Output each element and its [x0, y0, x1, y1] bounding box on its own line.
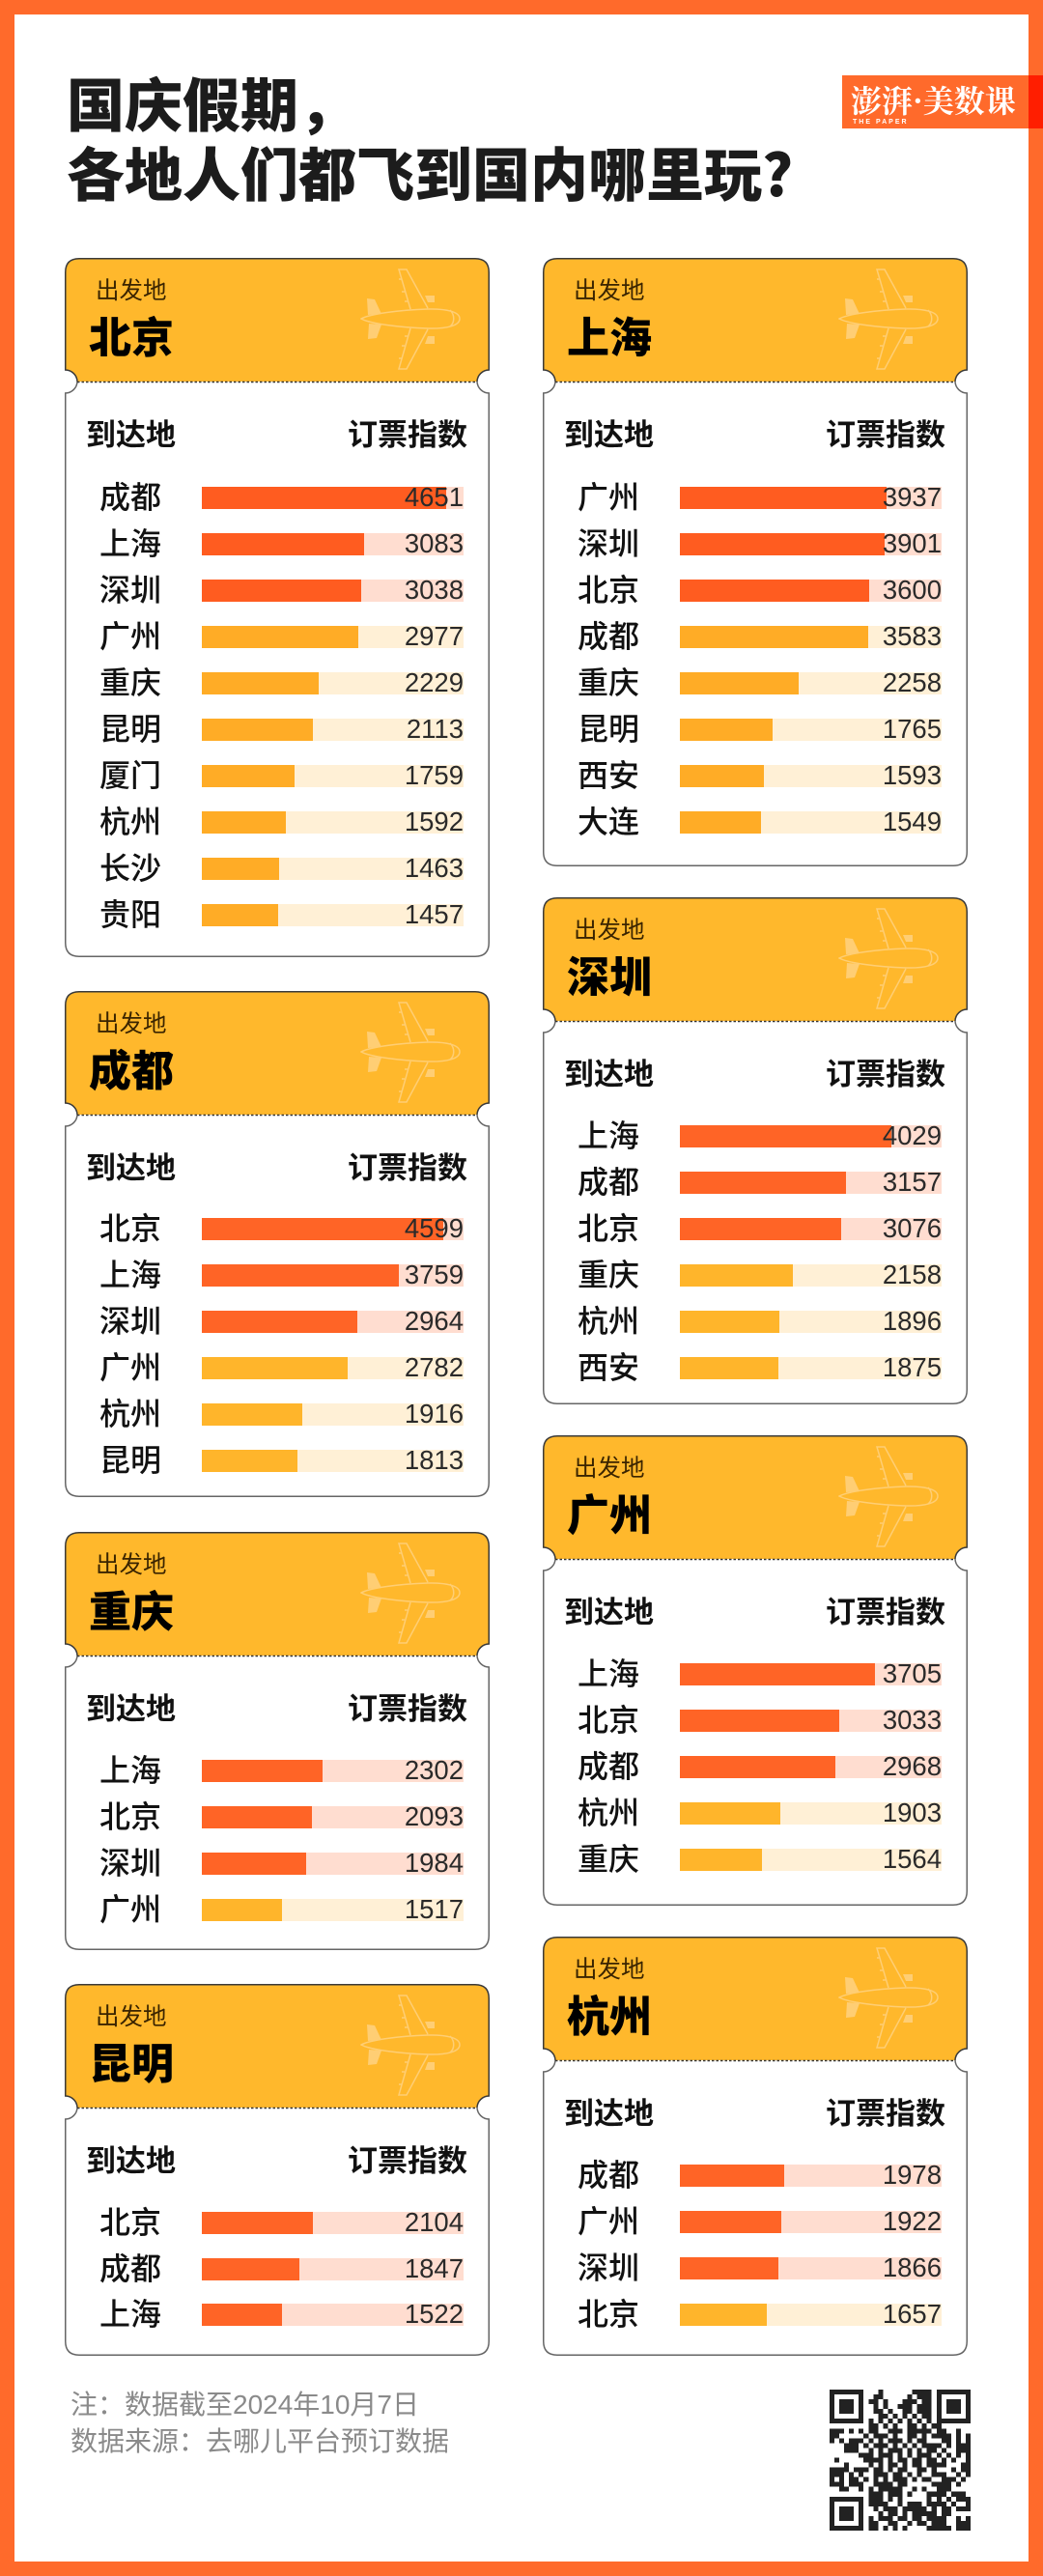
logo: 澎湃·美数课: THE PAPER	[853, 119, 909, 126]
row: 重庆 2158: 重庆	[578, 1251, 639, 1295]
row: 成都 3157	[543, 1172, 968, 1194]
title: 国庆假期，	[67, 60, 356, 144]
row: 成都 3583: 成都	[578, 612, 639, 657]
column heading: 订票指数: 订票指数	[826, 2089, 945, 2133]
row: 深圳 2964: 深圳	[99, 1297, 161, 1342]
city: 北京: 北京	[89, 303, 174, 365]
data source: 数据来源：去哪儿平台预订数据	[70, 2426, 449, 2456]
column heading: 到达地: 到达地	[564, 1050, 654, 1093]
row: 重庆 2258	[578, 659, 942, 703]
row: 深圳 3901: 深圳	[578, 520, 639, 564]
row: 北京 4599	[99, 1204, 464, 1249]
row: 重庆 2258: 2258	[883, 667, 942, 697]
panel: 杭州	[543, 1937, 968, 2356]
icon: airplane	[360, 1002, 461, 1103]
row: 厦门 1759	[99, 751, 464, 796]
column heading: 到达地: 到达地	[564, 1588, 654, 1631]
row: 杭州 1896: 1896	[883, 1306, 942, 1336]
city: 成都: 成都	[89, 1036, 174, 1098]
row: 北京 4599: 北京	[99, 1204, 161, 1249]
row: 杭州 1592: 1592	[405, 807, 464, 836]
row: 上海 3759: 3759	[405, 1260, 464, 1289]
label: 出发地: 出发地	[96, 1998, 166, 2032]
row: 昆明 1813	[99, 1436, 464, 1481]
row: 深圳 2964: 2964	[405, 1306, 464, 1336]
row: 成都 4651: 成都	[99, 473, 161, 518]
row: 成都 3583: 3583	[883, 621, 942, 651]
column heading: 到达地: 到达地	[86, 1684, 176, 1728]
row: 重庆 2158	[543, 1264, 968, 1287]
row: 北京 3076	[543, 1218, 968, 1240]
row: 广州 3937: 广州	[578, 473, 639, 518]
title	[67, 60, 793, 213]
row: 成都 2968	[543, 1756, 968, 1778]
row: 杭州 1903	[543, 1802, 968, 1825]
row: 广州 2782: 2782	[405, 1352, 464, 1382]
label: 出发地: 出发地	[96, 272, 166, 306]
row: 成都 3583	[578, 612, 942, 657]
row: 深圳 2964	[99, 1297, 464, 1342]
row: 上海 3705: 3705	[883, 1658, 942, 1688]
row: 北京 2104: 北京	[99, 2198, 161, 2243]
row: 北京 2104: 2104	[405, 2207, 464, 2237]
row: 昆明 2113	[99, 705, 464, 750]
row: 成都 3157: 3157	[883, 1167, 942, 1197]
row: 上海 1522: 1522	[405, 2299, 464, 2329]
row: 上海 3705	[543, 1663, 968, 1685]
row: 杭州 1903: 杭州	[578, 1789, 639, 1833]
city: 杭州: 杭州	[567, 1982, 652, 2044]
row: 昆明 2113: 2113	[407, 714, 464, 744]
icon: airplane	[838, 269, 939, 370]
row: 北京 3600: 北京	[578, 566, 639, 610]
row: 深圳 1984	[99, 1839, 464, 1883]
row: 广州 1922	[543, 2211, 968, 2233]
row: 成都 4651	[99, 473, 464, 518]
row: 广州 3937: 3937	[883, 482, 942, 512]
city: 重庆: 重庆	[89, 1577, 174, 1639]
row: 重庆 1564: 1564	[883, 1844, 942, 1874]
panel: 北京	[65, 258, 490, 957]
row: 北京 2093	[99, 1793, 464, 1837]
row: 深圳 1866: 1866	[883, 2252, 942, 2282]
row: 重庆 2229: 2229	[405, 667, 464, 697]
row: 深圳 3038	[99, 566, 464, 610]
row: 上海 4029: 4029	[883, 1120, 942, 1150]
row: 深圳 1866: 深圳	[578, 2244, 639, 2288]
row: 深圳 3038: 3038	[405, 575, 464, 605]
row: 大连 1549: 大连	[578, 798, 639, 842]
label: 出发地: 出发地	[574, 1450, 645, 1484]
row: 杭州 1903: 1903	[883, 1798, 942, 1827]
logo: 澎湃·美数课	[842, 75, 1043, 128]
row: 上海 3705: 上海	[578, 1650, 639, 1694]
row: 大连 1549: 1549	[883, 807, 942, 836]
row: 北京 2104	[99, 2198, 464, 2243]
row: 北京 1657: 北京	[578, 2290, 639, 2335]
row: 昆明 2113: 昆明	[99, 705, 161, 750]
row: 广州 2977: 2977	[405, 621, 464, 651]
row: 北京 1657: 1657	[883, 2299, 942, 2329]
column heading: 到达地: 到达地	[564, 410, 654, 454]
row: 上海 3759	[99, 1251, 464, 1295]
panel: 成都	[65, 991, 490, 1497]
row: 上海 4029: 上海	[578, 1112, 639, 1156]
row: 西安 1875: 1875	[883, 1352, 942, 1382]
QR code	[830, 2390, 971, 2531]
label: 出发地: 出发地	[96, 1005, 166, 1039]
column heading: 订票指数: 订票指数	[348, 2137, 467, 2180]
city: 昆明: 昆明	[89, 2029, 174, 2091]
row: 深圳 3901: 3901	[883, 528, 942, 558]
row: 北京 3076: 北京	[578, 1204, 639, 1249]
panel: 上海	[543, 258, 968, 866]
label: 出发地: 出发地	[574, 272, 645, 306]
row: 长沙 1463: 1463	[405, 853, 464, 883]
note: 注：数据截至2024年10月7日	[70, 2390, 419, 2420]
row: 成都 1978: 1978	[883, 2160, 942, 2190]
row: 广州 2782	[99, 1344, 464, 1388]
row: 北京 2093: 2093	[405, 1801, 464, 1831]
row: 广州 1922: 广州	[578, 2197, 639, 2242]
row: 成都 1847: 成都	[99, 2245, 161, 2289]
row: 长沙 1463	[99, 844, 464, 889]
row: 重庆 2258: 重庆	[578, 659, 639, 703]
row: 广州 2977	[99, 612, 464, 657]
row: 深圳 1984: 深圳	[99, 1839, 161, 1883]
row: 昆明 1765	[578, 705, 942, 750]
label: 出发地: 出发地	[574, 1951, 645, 1985]
row: 杭州 1916	[99, 1390, 464, 1434]
label: 出发地: 出发地	[96, 1546, 166, 1580]
row: 大连 1549	[543, 811, 968, 834]
row: 北京 3600	[578, 566, 942, 610]
row: 西安 1593	[543, 765, 968, 787]
row: 上海 3083	[99, 520, 464, 564]
row: 成都 1847: 1847	[405, 2253, 464, 2283]
column heading: 订票指数: 订票指数	[348, 1684, 467, 1728]
row: 北京 1657	[543, 2304, 968, 2326]
row: 北京 3033: 北京	[578, 1696, 639, 1741]
row: 北京 3033	[543, 1710, 968, 1732]
city: 广州: 广州	[567, 1481, 652, 1543]
row: 广州 1517: 1517	[405, 1894, 464, 1924]
row: 上海 3759: 上海	[99, 1251, 161, 1295]
row: 厦门 1759: 1759	[405, 760, 464, 790]
row: 杭州 1896	[543, 1311, 968, 1333]
column heading: 订票指数: 订票指数	[826, 410, 945, 454]
row: 广州 2977: 广州	[99, 612, 161, 657]
column heading: 到达地: 到达地	[564, 2089, 654, 2133]
row: 西安 1593: 1593	[883, 760, 942, 790]
row: 杭州 1896: 杭州	[578, 1297, 639, 1342]
row: 上海 2302: 上海	[99, 1746, 161, 1791]
row: 重庆 1564	[543, 1849, 968, 1871]
row: 成都 1978	[543, 2165, 968, 2187]
row: 北京 4599: 4599	[405, 1213, 464, 1243]
row: 上海 1522: 上海	[99, 2290, 161, 2335]
icon: airplane	[838, 1446, 939, 1547]
row: 成都 1978: 成都	[578, 2151, 639, 2195]
title: 各地人们都飞到国内哪里玩?	[67, 129, 793, 213]
row: 昆明 1765: 1765	[883, 714, 942, 744]
row: 西安 1875	[543, 1357, 968, 1379]
row: 成都 4651: 4651	[405, 482, 464, 512]
row: 深圳 1866	[543, 2257, 968, 2279]
panel: 重庆	[65, 1532, 490, 1950]
column heading: 到达地: 到达地	[86, 410, 176, 454]
row: 广州 1517	[99, 1885, 464, 1930]
row: 贵阳 1457	[99, 891, 464, 935]
row: 广州 2782: 广州	[99, 1344, 161, 1388]
icon: airplane	[360, 1995, 461, 2096]
row: 杭州 1592: 杭州	[99, 798, 161, 842]
column heading: 订票指数: 订票指数	[348, 1144, 467, 1187]
row: 上海 1522	[99, 2290, 464, 2335]
row: 深圳 1984: 1984	[405, 1848, 464, 1878]
row: 北京 3600: 3600	[883, 575, 942, 605]
column heading: 订票指数: 订票指数	[826, 1050, 945, 1093]
row: 广州 3937	[578, 473, 942, 518]
icon: airplane	[360, 269, 461, 370]
column heading: 订票指数: 订票指数	[826, 1588, 945, 1631]
row: 成都 2968: 成都	[578, 1742, 639, 1787]
row: 西安 1593: 西安	[578, 751, 639, 796]
row: 重庆 2229: 重庆	[99, 659, 161, 703]
row: 上海 2302: 2302	[405, 1755, 464, 1785]
column heading: 订票指数: 订票指数	[348, 410, 467, 454]
row: 上海 3083: 上海	[99, 520, 161, 564]
icon: airplane	[838, 908, 939, 1009]
city: 深圳: 深圳	[567, 943, 652, 1005]
icon: airplane	[838, 1947, 939, 2049]
row: 重庆 2158: 2158	[883, 1260, 942, 1289]
row: 杭州 1592	[99, 798, 464, 842]
row: 上海 2302	[99, 1746, 464, 1791]
row: 长沙 1463: 长沙	[99, 844, 161, 889]
panel: 深圳	[543, 897, 968, 1404]
city: 上海: 上海	[567, 303, 652, 365]
row: 上海 4029	[543, 1125, 968, 1147]
row: 贵阳 1457: 贵阳	[99, 891, 161, 935]
column heading: 到达地: 到达地	[86, 2137, 176, 2180]
row: 广州 1517: 广州	[99, 1885, 161, 1930]
row: 成都 2968: 2968	[883, 1751, 942, 1781]
row: 成都 1847	[99, 2245, 464, 2289]
row: 广州 1922: 1922	[883, 2206, 942, 2236]
row: 北京 3033: 3033	[883, 1705, 942, 1735]
panel: 昆明	[65, 1984, 490, 2356]
row: 上海 3083: 3083	[405, 528, 464, 558]
row: 厦门 1759: 厦门	[99, 751, 161, 796]
row: 重庆 2229	[99, 659, 464, 703]
panel: 广州	[543, 1435, 968, 1906]
label: 出发地: 出发地	[574, 912, 645, 946]
icon: airplane	[360, 1543, 461, 1644]
row: 杭州 1916: 杭州	[99, 1390, 161, 1434]
row: 昆明 1813: 1813	[405, 1445, 464, 1475]
row: 贵阳 1457: 1457	[405, 899, 464, 929]
row: 重庆 1564: 重庆	[578, 1835, 639, 1880]
logo: 澎湃·美数课: 澎湃·美数课	[851, 77, 1016, 122]
row: 昆明 1765: 昆明	[578, 705, 639, 750]
row: 北京 3076: 3076	[883, 1213, 942, 1243]
column heading: 到达地: 到达地	[86, 1144, 176, 1187]
row: 深圳 3038: 深圳	[99, 566, 161, 610]
row: 成都 3157: 成都	[578, 1158, 639, 1203]
row: 杭州 1916: 1916	[405, 1399, 464, 1429]
row: 深圳 3901	[578, 520, 942, 564]
row: 昆明 1813: 昆明	[99, 1436, 161, 1481]
row: 西安 1875: 西安	[578, 1344, 639, 1388]
row: 北京 2093: 北京	[99, 1793, 161, 1837]
